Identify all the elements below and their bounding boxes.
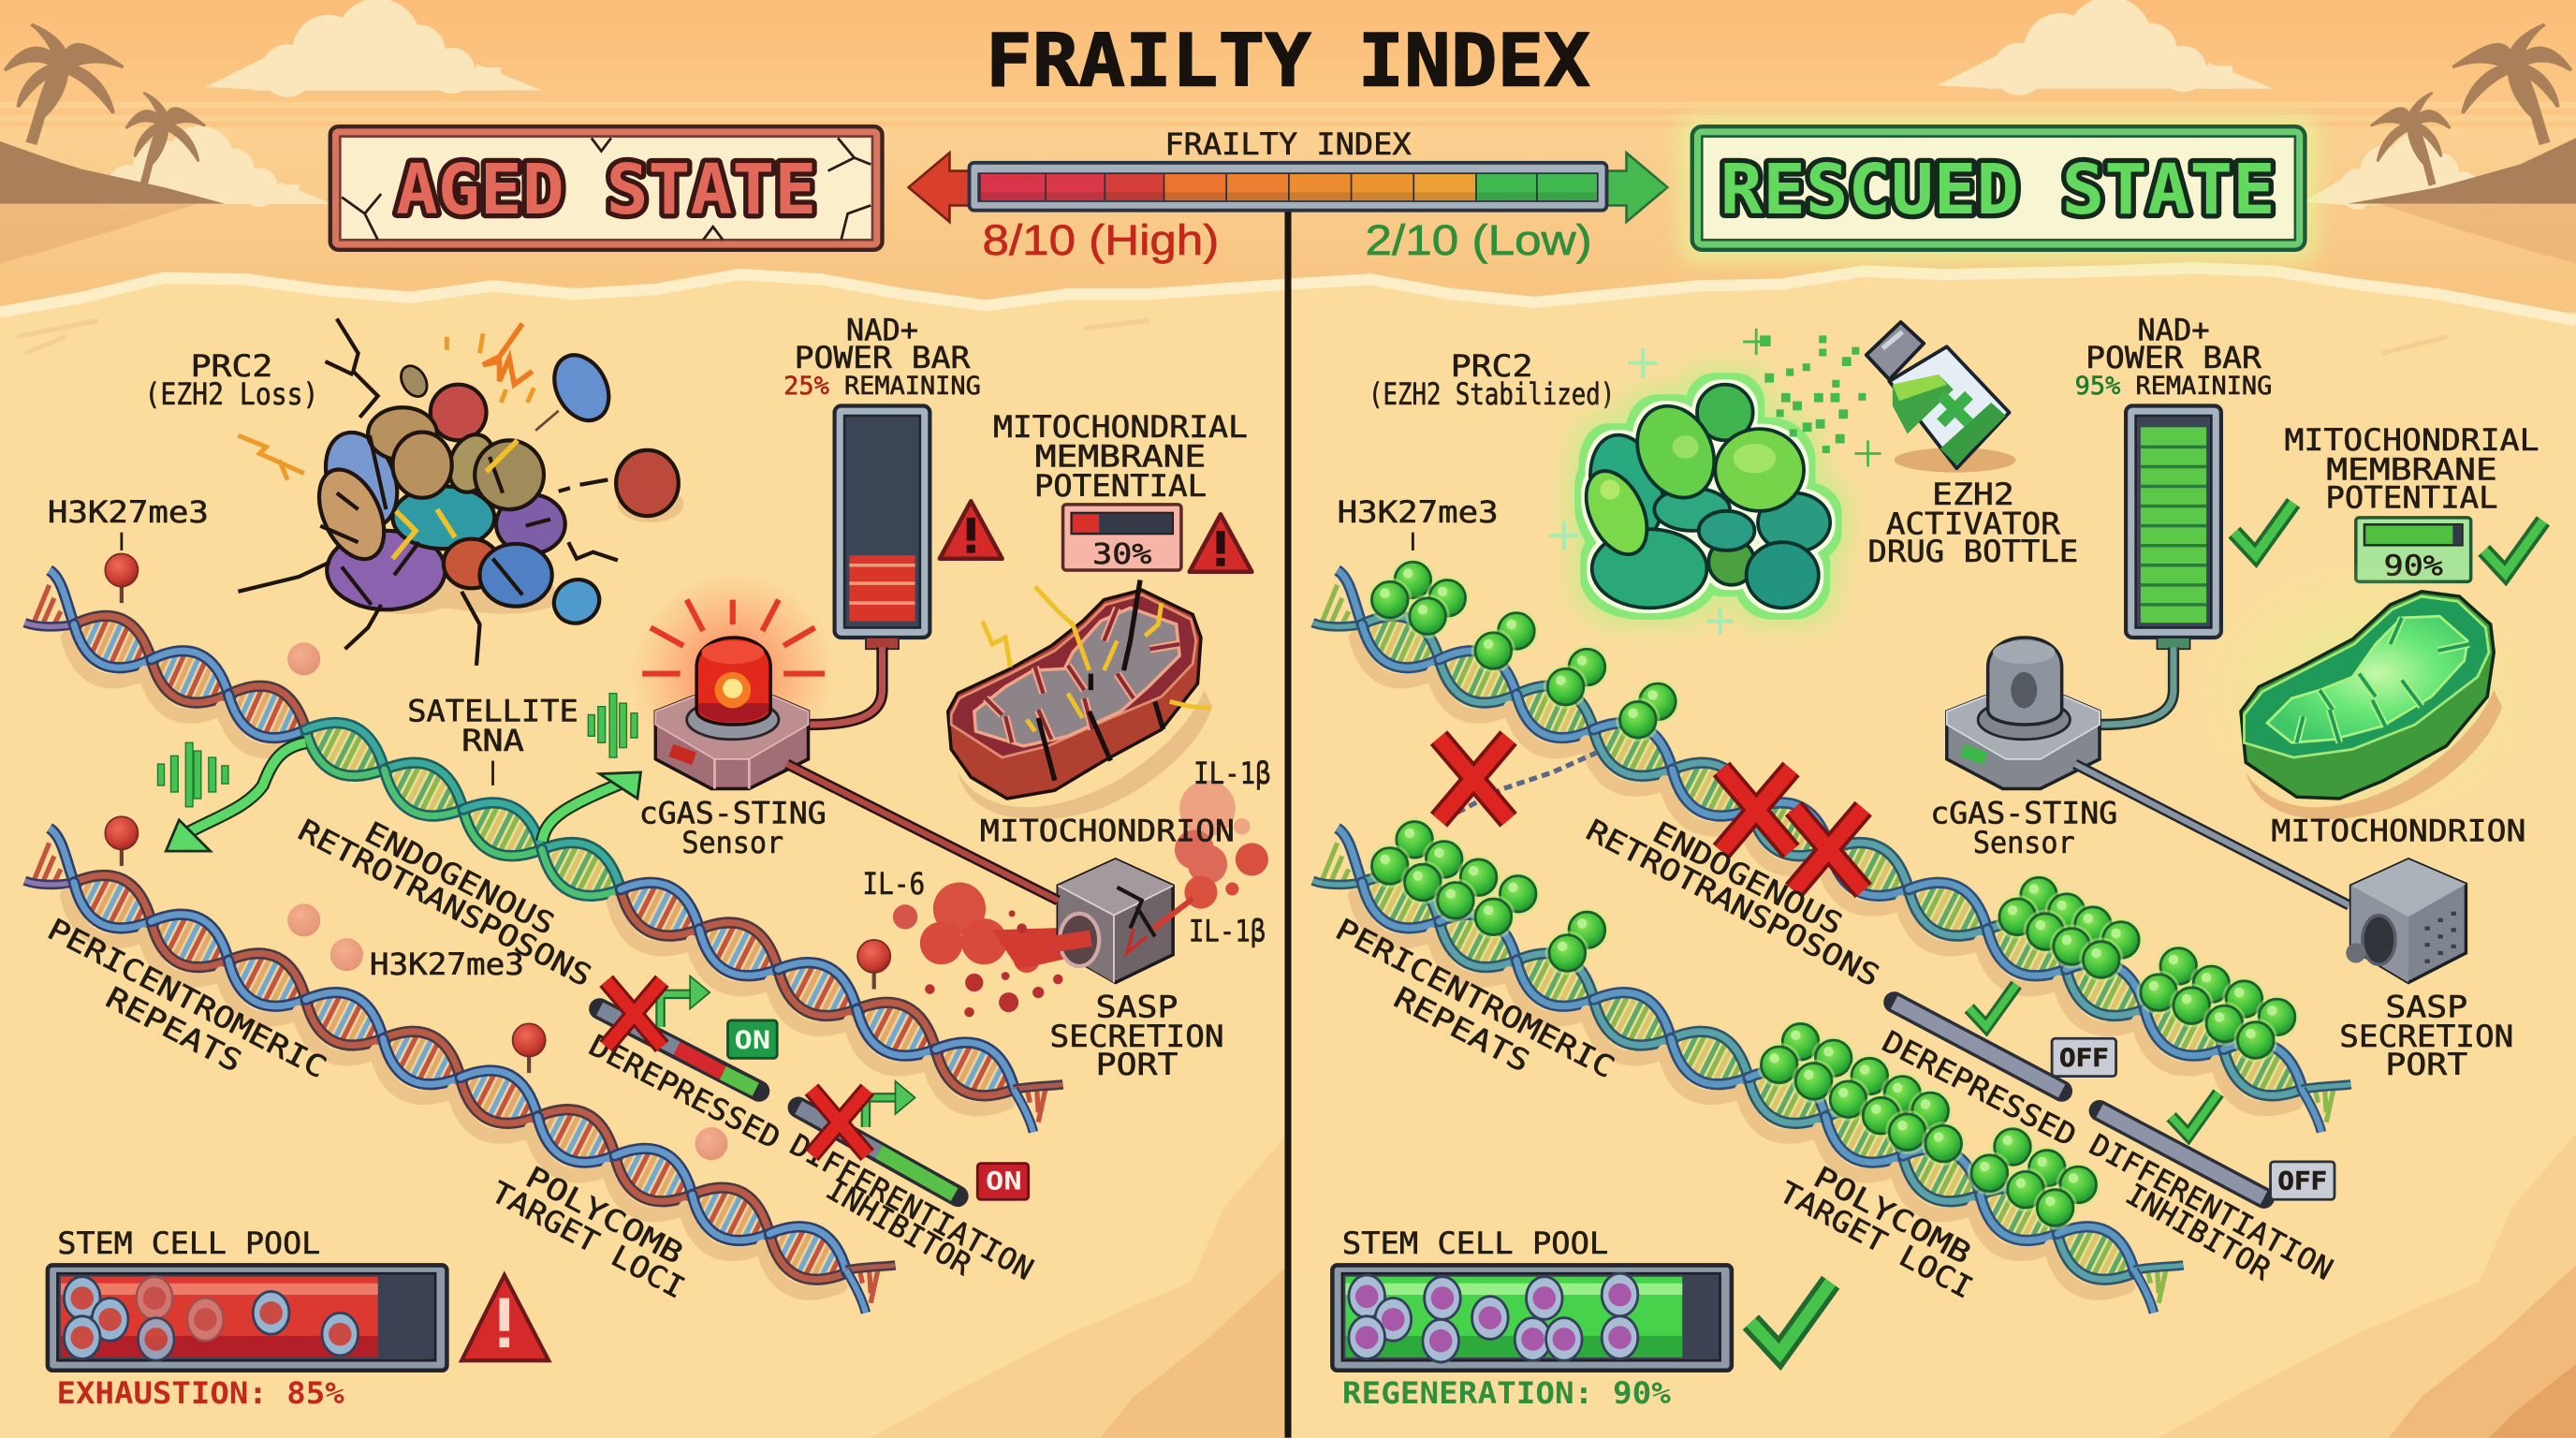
heading: STEM CELL POOL xyxy=(57,1227,320,1261)
label: cGAS-STING aged: cGAS-STING xyxy=(639,797,827,830)
label: PRC2 rescued: (EZH2 Stabilized) xyxy=(1368,378,1615,412)
divider xyxy=(1284,211,1292,1438)
label: mitochondrial potential rescued: MEMBRANE xyxy=(2326,453,2497,487)
label: PRC2 rescued: PRC2 xyxy=(1451,350,1533,384)
label: cGAS-STING aged xyxy=(639,797,827,860)
DNA strand: pericentromeric to polycomb rescued xyxy=(1312,829,2184,1313)
label: SASP port aged xyxy=(1050,990,1224,1082)
value: REGENERATION: 90% xyxy=(1342,1377,1671,1411)
check xyxy=(1750,1283,1831,1354)
banner: aged state xyxy=(330,126,882,250)
check: NAD xyxy=(2234,503,2293,555)
label: NAD power bar rescued: 95% REMAINING xyxy=(2075,373,2272,401)
diagonal labels rescued: REPEATS xyxy=(1388,981,1535,1079)
label: cGAS-STING aged: Sensor xyxy=(681,827,783,860)
gene switch: derepressed silenced: OFF xyxy=(2059,1045,2109,1073)
icon: EZH2 activator drug bottle xyxy=(1866,322,2016,473)
diagonal labels aged: POLYCOMB xyxy=(520,1161,688,1271)
island left with palms xyxy=(0,24,225,263)
battery aged xyxy=(835,406,929,649)
label: SASP port rescued: PORT xyxy=(2385,1049,2467,1082)
meter bar xyxy=(970,163,1606,211)
label: H3K27me3 lower: H3K27me3 xyxy=(370,948,524,982)
label: mitochondrial membrane potential aged: POTENTIAL xyxy=(1034,470,1207,504)
label: H3K27me3 rescued: H3K27me3 xyxy=(1338,496,1499,530)
diagonal labels rescued: DEREPRESSED xyxy=(1877,1025,2082,1153)
label: cGAS-STING rescued xyxy=(1930,797,2117,860)
label: PRC2 rescued xyxy=(1368,350,1615,412)
gene switch: derepressed aged: ON xyxy=(735,1027,770,1055)
labels: cytokines xyxy=(862,757,1271,949)
icon: healthy PRC2 complex xyxy=(1574,385,1830,608)
gauge 90%: 90% xyxy=(2384,550,2443,582)
gene switch: differentiation inhibitor silenced xyxy=(2100,1093,2334,1199)
label: mitochondrial potential rescued: POTENTIAL xyxy=(2325,481,2498,515)
icons: warnings xyxy=(940,501,1251,572)
label: mitochondrial membrane potential aged: MITOCHONDRIAL xyxy=(993,411,1248,445)
gene switch: differentiation inhibitor aged: ON xyxy=(986,1168,1022,1196)
label: PRC2 aged: (EZH2 Loss) xyxy=(144,378,318,412)
H3K27me3 spheres rescued xyxy=(1368,558,2299,1230)
icon: damaged mitochondrion xyxy=(948,580,1212,819)
frailty meter xyxy=(909,128,1667,264)
label: NAD power bar rescued xyxy=(2075,314,2272,401)
label: drug bottle xyxy=(1868,478,2078,569)
cable: sensor to SASP aged xyxy=(787,764,1058,901)
value: EXHAUSTION: 85% xyxy=(57,1377,344,1411)
DNA strand: endogenous retrotransposons xyxy=(24,570,1063,1132)
label: SASP port rescued: SECRETION xyxy=(2339,1020,2513,1054)
gene switch: differentiation inhibitor aged xyxy=(798,1081,1029,1199)
cable: sensor to SASP rescued xyxy=(2075,764,2349,905)
label: NAD power bar aged: 25% REMAINING xyxy=(783,373,981,401)
label: drug bottle: EZH2 xyxy=(1932,478,2014,512)
icon: cGAS-STING siren alarm xyxy=(631,572,835,788)
label: PRC2 aged xyxy=(144,350,318,412)
label: drug bottle: DRUG BOTTLE xyxy=(1868,536,2078,569)
label: mitochondrial membrane potential aged: MEMBRANE xyxy=(1035,440,1206,474)
label: satellite RNA: RNA xyxy=(461,725,524,758)
battery rescued xyxy=(2126,406,2221,649)
gauge 30% xyxy=(1063,505,1181,571)
diagonal labels rescued: POLYCOMB xyxy=(1808,1161,1976,1271)
label: mitochondrion rescued: MITOCHONDRION xyxy=(2271,815,2525,849)
arrow right xyxy=(1603,153,1667,222)
gene switch: derepressed aged xyxy=(600,976,777,1091)
DNA strand: pericentromeric to polycomb xyxy=(24,829,896,1313)
warning xyxy=(461,1275,549,1360)
label: SASP port aged: PORT xyxy=(1096,1049,1178,1082)
arrows: satellite RNA release xyxy=(166,742,640,851)
gauge 90% xyxy=(2356,518,2471,582)
particles: drug spray xyxy=(1743,329,1881,466)
label: NAD power bar rescued: POWER BAR xyxy=(2086,342,2262,375)
stem cell pool rescued xyxy=(1332,1227,1831,1411)
label: drug bottle: ACTIVATOR xyxy=(1886,507,2061,541)
label: NAD power bar aged: NAD+ xyxy=(846,314,918,347)
diagonal labels rescued xyxy=(1330,814,2338,1306)
label: NAD power bar aged: POWER BAR xyxy=(795,342,971,375)
diagonal labels aged: PERICENTROMERIC xyxy=(42,913,331,1085)
diagonal labels aged: RETROTRANSPOSONS xyxy=(293,814,596,993)
icon: shattered PRC2 complex xyxy=(238,318,683,666)
banner: rescued state: RESCUED STATE xyxy=(1720,151,2276,230)
labels: cytokines: IL-1β xyxy=(1193,757,1271,791)
diagonal labels rescued: INHIBITOR xyxy=(2120,1178,2276,1288)
DNA strand: endogenous retrotransposons rescued xyxy=(1312,570,2351,1132)
diagonal labels rescued: TARGET LOCI xyxy=(1774,1176,1978,1306)
label: NAD power bar rescued: NAD+ xyxy=(2137,314,2210,347)
stem cell pool aged xyxy=(48,1227,549,1411)
diagonal labels rescued: ENDOGENOUS xyxy=(1647,815,1848,942)
diagonal labels aged: DEREPRESSED xyxy=(583,1029,785,1156)
label: cGAS-STING rescued: Sensor xyxy=(1973,827,2075,860)
labels: cytokines: IL-6 xyxy=(862,868,925,902)
icon: closed SASP port xyxy=(2346,859,2466,983)
label: mitochondrial potential rescued xyxy=(2284,424,2539,515)
H3K27me3 marks aged xyxy=(105,553,890,1160)
label: mitochondrial potential rescued: MITOCHONDRIAL xyxy=(2284,424,2539,458)
diagonal labels rescued: PERICENTROMERIC xyxy=(1330,913,1619,1085)
label: cGAS-STING rescued: cGAS-STING xyxy=(1930,797,2117,830)
rescued score: 2/10 (Low) xyxy=(1365,216,1592,264)
diagonal labels rescued: RETROTRANSPOSONS xyxy=(1581,814,1884,993)
label: mitochondrion aged: MITOCHONDRION xyxy=(980,815,1235,849)
banner: rescued state xyxy=(1679,115,2318,263)
label: SASP port rescued: SASP xyxy=(2385,990,2467,1024)
icon: blocked RNA marks xyxy=(1439,738,1864,890)
diagonal labels aged xyxy=(42,814,1038,1306)
title: FRAILTY INDEX xyxy=(986,19,1590,103)
icon: sound waves xyxy=(157,694,637,807)
icon: healthy mitochondrion xyxy=(2193,559,2539,829)
icon: silent cGAS-STING sensor xyxy=(1947,638,2100,788)
label: SASP port aged: SASP xyxy=(1096,990,1178,1024)
gauge 30%: 30% xyxy=(1092,538,1151,571)
labels: cytokines: IL-1β xyxy=(1189,916,1266,949)
icon: SASP port with cytokine burst xyxy=(893,781,1268,1017)
diagonal labels aged: ENDOGENOUS xyxy=(359,815,560,942)
diagonal labels aged: DIFFERENTIATION xyxy=(784,1128,1038,1287)
cable: battery to sensor aged xyxy=(809,648,882,725)
sparkles xyxy=(1549,348,1734,634)
clouds left xyxy=(63,0,542,210)
diagonal labels aged: INHIBITOR xyxy=(820,1173,977,1283)
clouds right xyxy=(1937,0,2523,210)
arrow left xyxy=(909,153,973,222)
banner: aged state: AGED STATE xyxy=(396,151,816,230)
gene switch: differentiation inhibitor silenced: OFF xyxy=(2277,1168,2327,1196)
island right with palms xyxy=(2348,24,2576,263)
gauge xyxy=(48,1265,446,1371)
label: SASP port aged: SECRETION xyxy=(1050,1020,1224,1054)
diagonal labels rescued: DIFFERENTIATION xyxy=(2084,1128,2338,1287)
label: satellite RNA: SATELLITE xyxy=(407,695,578,728)
gauge xyxy=(1332,1265,1732,1371)
heading: STEM CELL POOL xyxy=(1342,1227,1608,1261)
label: satellite RNA xyxy=(407,695,578,785)
panel: rescued state xyxy=(1312,314,2543,1411)
gene switch: derepressed silenced xyxy=(1895,985,2116,1091)
diagonal labels aged: TARGET LOCI xyxy=(486,1176,690,1306)
label: PRC2 aged: PRC2 xyxy=(191,350,272,384)
aged score: 8/10 (High) xyxy=(983,216,1219,264)
panel: aged state xyxy=(24,314,1271,1411)
label: SASP port rescued xyxy=(2339,990,2513,1082)
check: gauge xyxy=(2484,521,2543,574)
label: NAD power bar aged xyxy=(783,314,981,401)
cable: battery to sensor rescued xyxy=(2100,648,2174,725)
label: mitochondrial membrane potential aged xyxy=(993,411,1248,504)
diagonal labels aged: REPEATS xyxy=(100,981,247,1079)
meter heading: FRAILTY INDEX xyxy=(1164,128,1412,162)
label: H3K27me3 top: H3K27me3 xyxy=(48,496,209,530)
